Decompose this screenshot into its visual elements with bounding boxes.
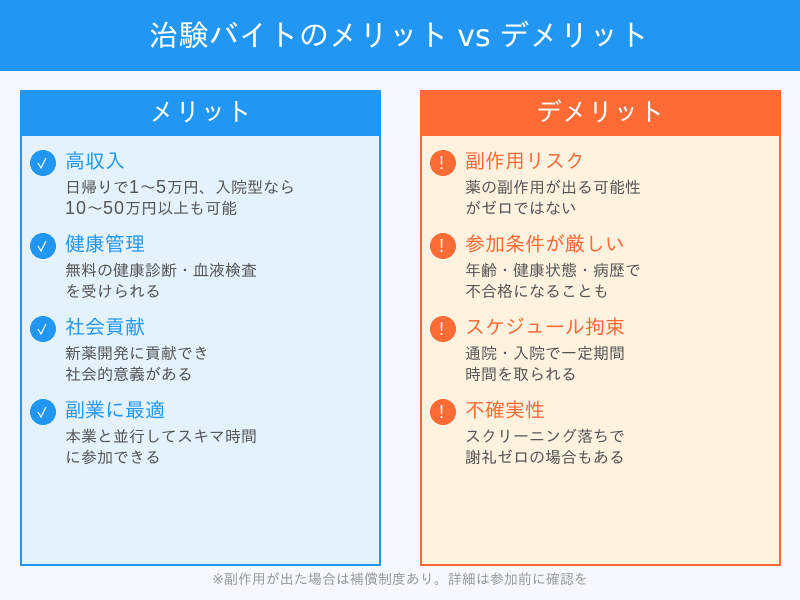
item text: 通院・入院で一定期間	[465, 344, 625, 363]
item heading: 不確実性	[465, 398, 545, 422]
icon: check	[30, 399, 56, 425]
item text: 薬の副作用が出る可能性	[465, 178, 641, 197]
panel: demerits	[420, 90, 781, 566]
item heading: 社会貢献	[65, 315, 145, 339]
item text: 10〜50万円以上も可能	[65, 198, 237, 218]
item text: がゼロではない	[465, 199, 577, 218]
icon: check	[30, 233, 56, 259]
icon: exclamation	[430, 233, 456, 259]
item text	[465, 344, 625, 384]
item heading: 高収入	[65, 149, 125, 173]
icon: exclamation	[430, 316, 456, 342]
item: side job	[30, 398, 257, 467]
item heading: 副業に最適	[65, 398, 165, 422]
icon: exclamation	[430, 150, 456, 176]
item text	[65, 427, 257, 467]
item text	[65, 177, 295, 218]
item: health management	[30, 232, 257, 301]
item heading: 健康管理	[65, 232, 145, 256]
item text	[65, 344, 209, 384]
icon: exclamation: !	[439, 402, 444, 422]
icon: check	[30, 316, 56, 342]
item text	[465, 178, 641, 218]
item: strict conditions	[430, 232, 641, 301]
footnote: ※副作用が出た場合は補償制度あり。詳細は参加前に確認を	[212, 572, 588, 588]
item: social contribution	[30, 315, 209, 384]
item: schedule restriction	[430, 315, 625, 384]
item: high income	[30, 149, 295, 218]
icon: exclamation	[430, 399, 456, 425]
panel heading: demerits	[420, 90, 781, 136]
item text: 新薬開発に貢献でき	[65, 344, 209, 363]
item text	[65, 261, 257, 301]
icon: exclamation: !	[439, 153, 444, 173]
panel heading: merits	[20, 90, 381, 136]
item text: 本業と並行してスキマ時間	[65, 427, 257, 446]
panel: merits	[20, 90, 381, 566]
item text: 日帰りで1〜5万円、入院型なら	[65, 177, 295, 197]
panel heading: demerits: デメリット	[536, 98, 665, 128]
item text: 謝礼ゼロの場合もある	[465, 448, 625, 467]
title	[0, 0, 800, 71]
item heading: スケジュール拘束	[465, 315, 625, 339]
item text: に参加できる	[65, 448, 161, 467]
item text	[465, 261, 641, 301]
icon: exclamation: !	[439, 236, 444, 256]
item text: を受けられる	[65, 282, 161, 301]
item: side effect risk	[430, 149, 641, 218]
item: uncertainty	[430, 398, 625, 467]
icon: check	[30, 150, 56, 176]
item text: 無料の健康診断・血液検査	[65, 261, 257, 280]
item heading: 副作用リスク	[465, 149, 585, 173]
item text	[465, 427, 625, 467]
title: 治験バイトのメリット vs デメリット	[149, 19, 649, 54]
item text: 時間を取られる	[465, 365, 577, 384]
item heading: 参加条件が厳しい	[465, 232, 625, 256]
item text: スクリーニング落ちで	[465, 427, 625, 446]
item text: 不合格になることも	[465, 282, 609, 301]
panel heading: merits: メリット	[149, 98, 252, 128]
item text: 年齢・健康状態・病歴で	[465, 261, 641, 280]
icon: exclamation: !	[439, 319, 444, 339]
item text: 社会的意義がある	[65, 365, 193, 384]
